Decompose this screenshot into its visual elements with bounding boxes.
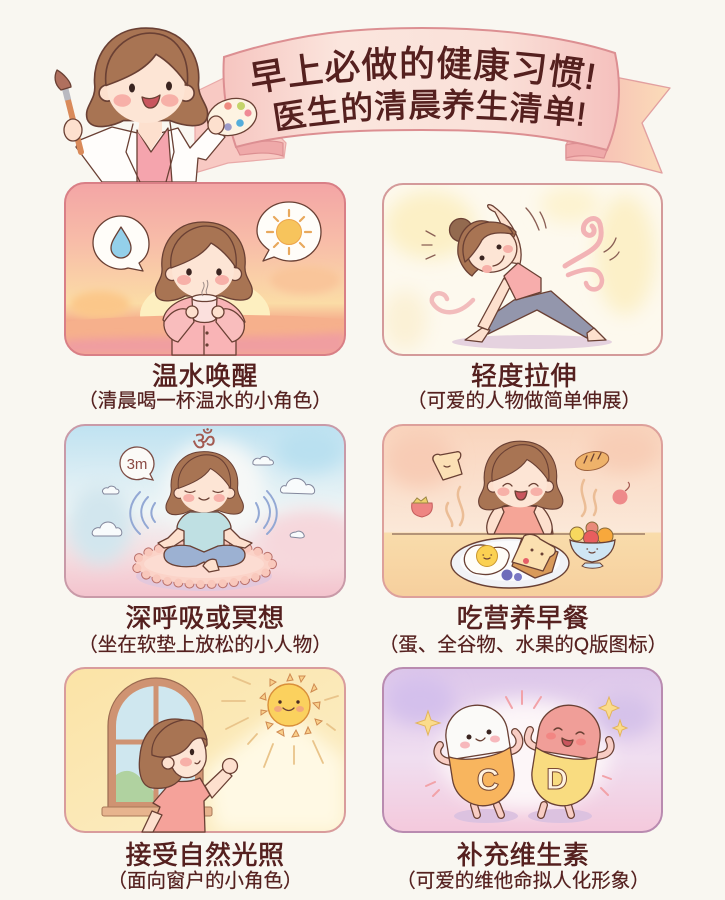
doctor coat and arms [76, 124, 225, 182]
hand [222, 758, 238, 774]
pink top [504, 263, 541, 300]
legs [164, 545, 245, 567]
head [479, 441, 563, 510]
mug [192, 298, 217, 322]
arms [158, 522, 192, 548]
raised arm [488, 205, 521, 264]
top [489, 506, 553, 534]
ribbon left tail [195, 78, 286, 173]
caption: breakfast heading: 吃营养早餐 [457, 603, 589, 633]
capsule [442, 701, 519, 810]
hands on cheeks [487, 503, 504, 534]
ear [162, 757, 174, 769]
face details [190, 749, 194, 755]
pill shadow right [528, 809, 592, 823]
vitamin C pill [437, 701, 519, 815]
feet [465, 328, 490, 342]
swirl right low [568, 269, 602, 289]
panel background wash [383, 668, 662, 832]
stretching character [450, 205, 606, 342]
speech bubble: 3m: 3m [127, 456, 147, 473]
right hand [208, 116, 224, 134]
pill shadows [454, 809, 518, 823]
pajama buttons [203, 326, 205, 355]
floating bread [574, 449, 610, 473]
character in pajamas [155, 222, 252, 355]
panel border [383, 184, 662, 355]
limbs fill [437, 732, 519, 815]
hands [186, 306, 198, 318]
sparkle rays [426, 691, 611, 796]
swirl left [432, 293, 473, 312]
panel: light stretching [383, 184, 662, 355]
doctor smile [142, 95, 160, 108]
face [466, 734, 472, 740]
face [170, 732, 206, 778]
panel border [383, 425, 662, 597]
panel: natural light [65, 668, 345, 832]
raised arm [205, 768, 232, 798]
panel: vitamins [383, 668, 662, 832]
table edge line [392, 533, 645, 535]
caption: breathing description: （坐在软垫上放松的小人物） [78, 634, 332, 656]
happy eyes [503, 484, 538, 486]
capsule [527, 701, 604, 810]
foot [203, 559, 219, 572]
caption: vitamins heading: 补充维生素 [457, 840, 589, 870]
header: title ribbon [195, 28, 670, 173]
speech bubble: sun [257, 202, 321, 261]
clouds [92, 456, 315, 538]
floating strawberry [412, 497, 432, 517]
face details [496, 244, 502, 250]
hair [458, 221, 516, 276]
om symbol: ॐ [192, 421, 216, 458]
face [554, 728, 584, 734]
panel background wash [65, 425, 360, 597]
ribbon main band [224, 28, 619, 150]
doctor eyes [129, 84, 135, 92]
doctor head [87, 28, 208, 127]
vitamin D pill [527, 701, 611, 815]
caption: breathing heading: 深呼吸或冥想 [125, 603, 285, 633]
motion lines [422, 208, 619, 260]
lower arm [142, 811, 162, 832]
character eating [479, 441, 563, 534]
hair back [139, 719, 207, 788]
panel: healthy breakfast [383, 425, 662, 597]
caption: vitamins description: （可爱的维他命拟人化形象） [396, 870, 650, 892]
dress [150, 778, 210, 832]
left hand [64, 119, 82, 141]
sun rays [222, 677, 338, 767]
title text line 2: 医生的清晨养生清单! [274, 88, 585, 132]
caption: warm water heading: 温水唤醒 [152, 361, 258, 391]
face [462, 222, 522, 278]
panel background wash [383, 425, 662, 597]
open smile [515, 491, 527, 500]
floating cherry [612, 482, 629, 504]
panel: deep breathing [65, 421, 360, 597]
letter D: D [546, 763, 568, 796]
fruit bowl [570, 522, 615, 568]
shirt [177, 512, 231, 552]
meditating character [158, 452, 252, 572]
sleeves [164, 309, 194, 342]
limbs outline [528, 730, 611, 815]
supporting arm [478, 278, 511, 330]
toast [512, 534, 558, 578]
panel border [65, 425, 345, 597]
caption: stretching description: （可爱的人物做简单伸展） [407, 390, 641, 412]
panel border [65, 183, 345, 355]
speech bubble: water drop [93, 216, 149, 271]
panel background wash [65, 668, 345, 832]
ribbon right fold [566, 143, 607, 158]
swirl right top [565, 219, 601, 266]
steam lines [446, 480, 596, 526]
pink scrubs [137, 128, 172, 182]
floor shadow [452, 335, 612, 349]
head [166, 452, 243, 515]
cushion [136, 544, 272, 584]
title text line 1: 早上必做的健康习惯! [252, 45, 594, 92]
cushion shadow [136, 561, 272, 591]
girl by window [139, 719, 238, 832]
bangs [152, 720, 207, 757]
sun [260, 674, 322, 737]
caption: breakfast description: （蛋、全谷物、水果的Q版图标） [379, 634, 667, 656]
blueberries [502, 570, 522, 581]
limbs fill [528, 730, 611, 815]
caption: light heading: 接受自然光照 [125, 840, 285, 870]
steam [202, 280, 208, 296]
palette [203, 93, 261, 141]
pajama body [163, 296, 245, 355]
sound waves [130, 491, 277, 534]
hair bun [450, 218, 472, 242]
window [102, 678, 212, 816]
ribbon right tail [566, 78, 670, 173]
paintbrush [55, 70, 81, 152]
caption: light description: （面向窗户的小角色） [107, 870, 303, 892]
header: doctor character [55, 28, 261, 182]
letter C: C [477, 762, 499, 797]
panel border [65, 668, 345, 832]
eyes [186, 268, 192, 276]
plate [451, 538, 569, 588]
floating toast [433, 452, 462, 480]
neck [138, 118, 162, 150]
speech bubble: 3m [120, 447, 154, 480]
closed eyes and smile [185, 491, 223, 500]
arms and legs [437, 732, 519, 815]
panel border [383, 668, 662, 832]
panel background wash [383, 184, 662, 355]
ribbon left fold [236, 141, 283, 156]
panel background wash [65, 183, 345, 355]
caption: stretching heading: 轻度拉伸 [471, 361, 577, 391]
bangs [463, 222, 513, 262]
fried egg [464, 545, 509, 574]
caption: warm water description: （清晨喝一杯温水的小角色） [78, 390, 332, 412]
head [155, 222, 252, 301]
coat lapels [126, 122, 174, 182]
legs [482, 291, 596, 338]
panel: warm water [65, 183, 345, 355]
sparkles [416, 697, 627, 736]
